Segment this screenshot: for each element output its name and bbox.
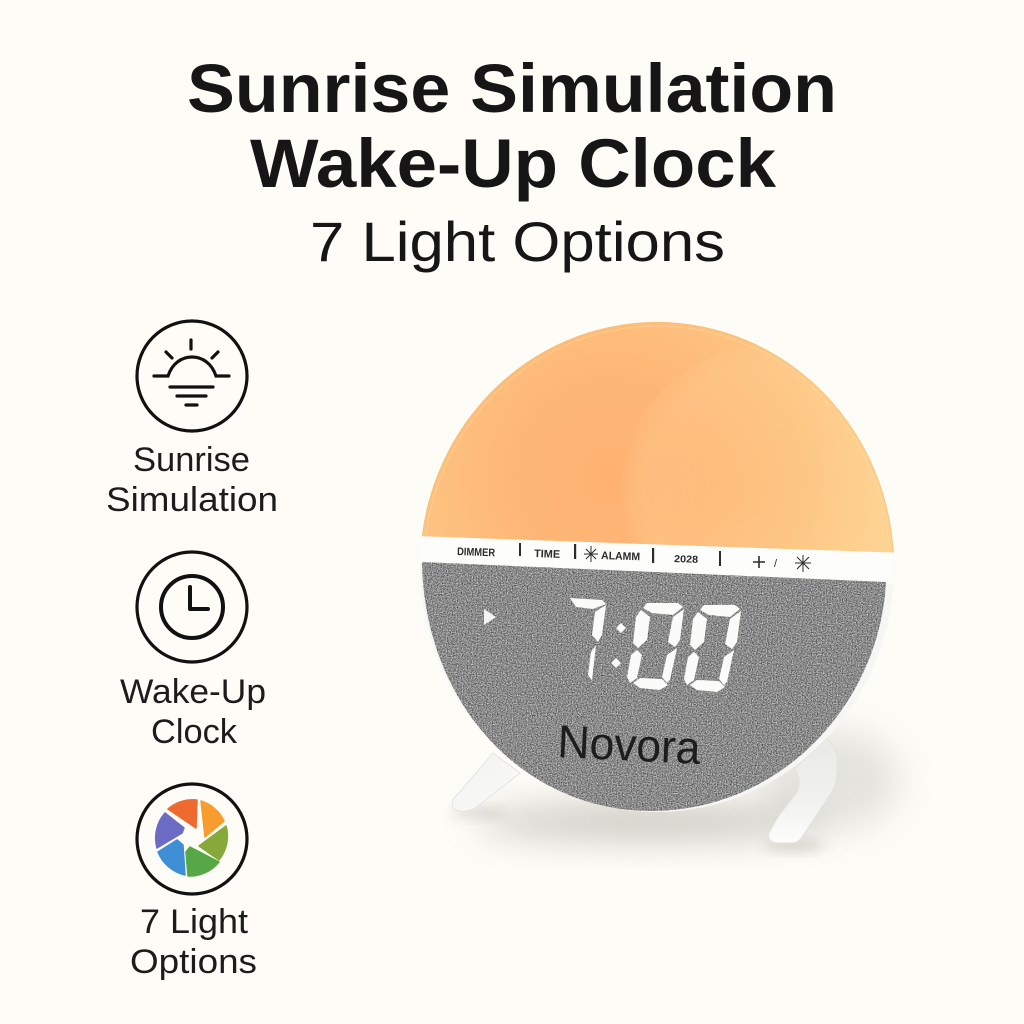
control labels: DIMMER [457, 546, 495, 559]
floor shadow [450, 730, 900, 850]
icon: clock [137, 552, 247, 662]
white control band [422, 536, 824, 550]
control labels: 2028 [674, 554, 699, 566]
light dome [422, 322, 894, 552]
label: wake-up clock [120, 673, 266, 751]
label: sunrise simulation: Sunrise [133, 441, 250, 479]
label: 7 light options [130, 903, 257, 981]
feature: sunrise simulation [106, 321, 278, 519]
title line: Wake-Up Clock: Wake-Up Clock [250, 125, 777, 202]
title line: Sunrise Simulation: Sunrise Simulation [187, 50, 837, 127]
subtitle: 7 Light Options [310, 210, 725, 273]
stand foot: left [452, 753, 520, 811]
icon: color aperture [137, 784, 247, 894]
colon [611, 623, 626, 668]
label: 7 light options: 7 Light [140, 903, 249, 941]
control labels: TIME [534, 548, 560, 561]
feature: 7 light options [130, 784, 257, 981]
brand name: Novora [557, 715, 702, 774]
label: sunrise simulation [106, 441, 278, 519]
digit 7 [570, 598, 606, 680]
label: wake-up clock: Clock [151, 713, 238, 751]
icon: sunrise [137, 321, 247, 431]
digit 0 [684, 605, 741, 692]
clock body rim [420, 322, 894, 812]
label: wake-up clock: Wake-Up [120, 673, 266, 711]
label: 7 light options: Options [130, 943, 257, 981]
digit 0 [627, 603, 684, 690]
title [187, 50, 837, 273]
feature: wake-up clock [120, 552, 266, 751]
stand foot: right [768, 739, 837, 843]
control labels: ALAMM [601, 550, 640, 563]
label: sunrise simulation: Simulation [106, 481, 278, 519]
control labels [457, 543, 811, 572]
control labels: / [774, 558, 778, 570]
product: sunrise alarm clock [410, 310, 918, 850]
play indicator [484, 609, 496, 625]
led display [570, 598, 741, 692]
fabric panel [415, 555, 895, 817]
